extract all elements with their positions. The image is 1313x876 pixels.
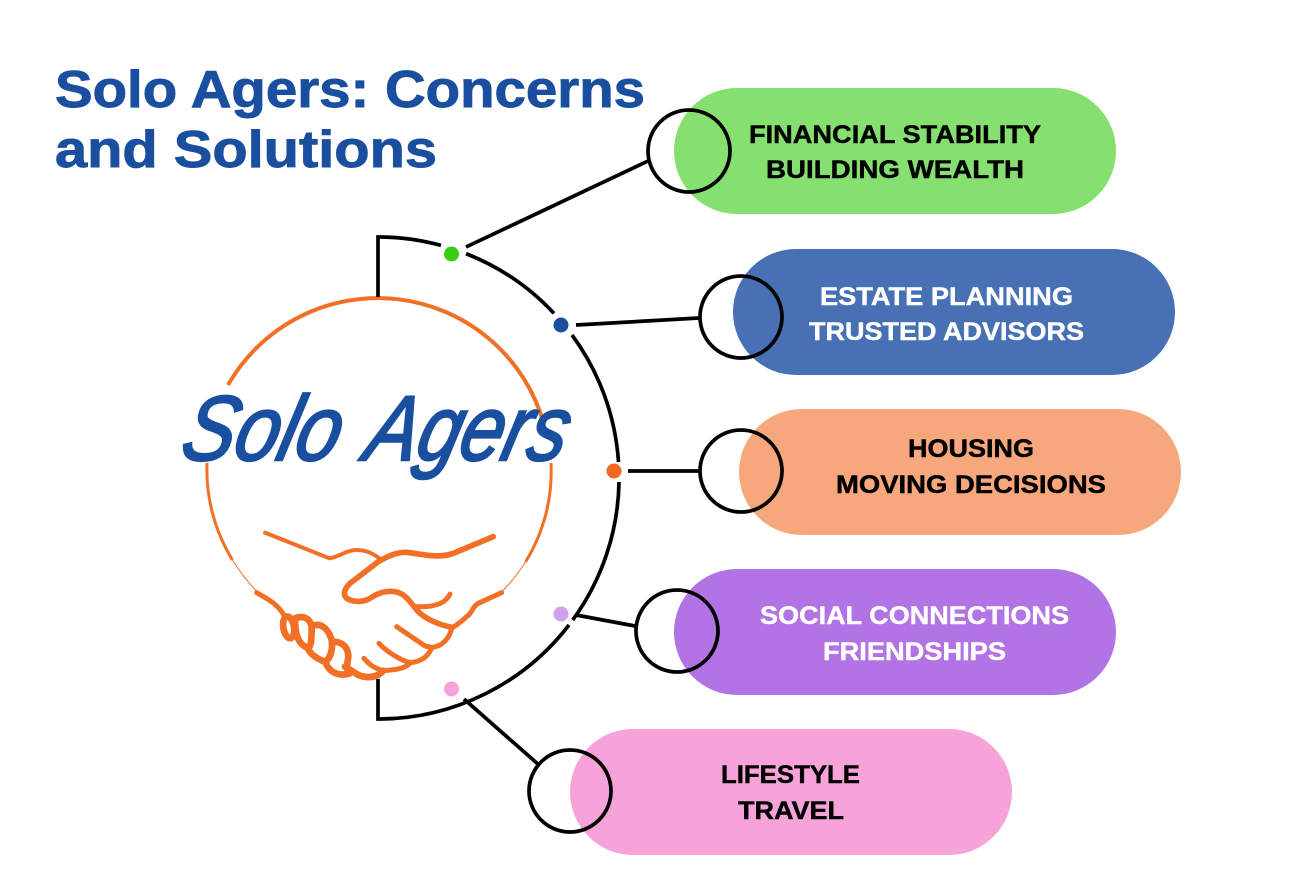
label 5 — [721, 761, 860, 825]
ring 1 — [648, 110, 730, 192]
pill: estate planning — [576, 249, 1175, 375]
label 3: MOVING DECISIONS — [836, 471, 1106, 499]
dot: green — [444, 246, 459, 262]
dot: blue — [554, 318, 568, 332]
label 5: TRAVEL — [738, 797, 844, 825]
icon: handshake — [257, 533, 502, 677]
label 2: ESTATE PLANNING — [820, 283, 1073, 311]
logo wordmark — [173, 376, 583, 480]
logo ring — [207, 298, 551, 593]
title: Solo Agers: Concerns — [55, 61, 645, 119]
label 1 — [749, 121, 1041, 184]
pill: financial stability — [466, 88, 1116, 247]
logo wordmark: Solo — [173, 376, 356, 480]
title: and Solutions — [55, 121, 437, 179]
label 2 — [809, 283, 1084, 346]
label 1: FINANCIAL STABILITY — [749, 121, 1041, 149]
ring 2 — [700, 276, 782, 358]
pill: social connections — [576, 569, 1116, 695]
label 2: TRUSTED ADVISORS — [809, 318, 1084, 346]
ring 5 — [529, 750, 611, 832]
pill: lifestyle — [464, 699, 1012, 855]
logo: Solo Agers — [173, 298, 583, 677]
connector 5 — [464, 699, 539, 765]
dot: orange — [606, 464, 622, 478]
label 3: HOUSING — [908, 435, 1034, 463]
ring 3 — [700, 430, 782, 512]
dot: pink — [444, 682, 459, 696]
big arc frame — [378, 237, 619, 719]
label 4: FRIENDSHIPS — [823, 638, 1006, 666]
label 1: BUILDING WEALTH — [766, 156, 1024, 184]
connector 2 — [576, 318, 699, 325]
label 5: LIFESTYLE — [721, 761, 860, 789]
pill: housing — [628, 409, 1181, 535]
ring 4 — [636, 590, 718, 672]
connector 4 — [576, 615, 635, 626]
connector 1 — [466, 161, 648, 247]
logo wordmark: Agers — [353, 376, 583, 480]
title — [55, 61, 645, 179]
label 4: SOCIAL CONNECTIONS — [760, 602, 1069, 630]
dot: purple — [554, 606, 568, 622]
label 3 — [836, 435, 1106, 499]
label 4 — [760, 602, 1069, 666]
connector 3 — [628, 469, 699, 473]
